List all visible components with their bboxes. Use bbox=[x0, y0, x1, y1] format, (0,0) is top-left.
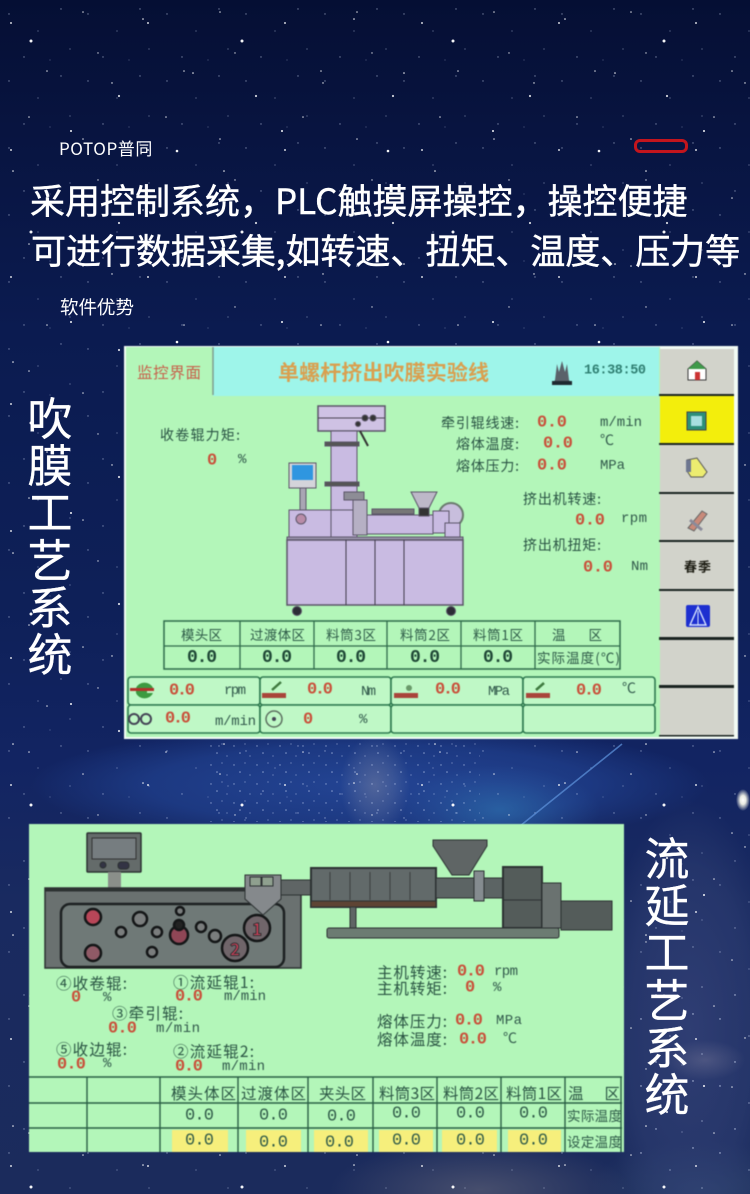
icon: tools bbox=[688, 511, 707, 531]
temperature table: 0.0 bbox=[410, 648, 440, 668]
temperature table: 0.0 bbox=[392, 1104, 421, 1124]
temperature table: 0.0 bbox=[519, 1132, 548, 1150]
vertical title: blown film: 统 bbox=[27, 619, 72, 684]
status grid: rpm bbox=[224, 683, 246, 699]
readouts: main drive and melt: 主机转速: bbox=[377, 961, 447, 983]
temperature table bbox=[164, 621, 620, 669]
readouts: roller speeds: 0.0 bbox=[57, 1056, 86, 1074]
temperature table: 0.0 bbox=[262, 648, 292, 668]
readouts: extruder speed and torque: 0.0 bbox=[575, 512, 605, 530]
temperature table: 0.0 bbox=[336, 648, 366, 668]
temperature table: 0.0 bbox=[259, 1134, 288, 1152]
status grid: 0.0 bbox=[576, 682, 602, 700]
temperature table: 0.0 bbox=[325, 1134, 354, 1152]
readouts: main drive and melt: 0.0 bbox=[459, 1030, 487, 1050]
vertical title: blown film: 吹 bbox=[27, 383, 72, 448]
readouts: main drive and melt: 熔体温度: bbox=[377, 1028, 447, 1050]
status grid: m/min bbox=[215, 714, 256, 730]
readouts: haul-off, melt temperature, melt pressure: 0.0 bbox=[537, 414, 567, 432]
readouts: extruder speed and torque bbox=[523, 489, 648, 578]
section label: 软件优势 bbox=[60, 294, 134, 320]
readouts: main drive and melt: 主机转矩: bbox=[377, 977, 447, 999]
temperature table: 0.0 bbox=[456, 1104, 485, 1124]
temperature table: 0.0 bbox=[185, 1132, 214, 1150]
temperature table: 0.0 bbox=[483, 648, 513, 668]
readouts: roller speeds: % bbox=[103, 990, 112, 1006]
readouts: roller speeds: m/min bbox=[224, 989, 266, 1005]
temperature table: 设定温度 bbox=[567, 1131, 622, 1151]
readouts: haul-off, melt temperature, melt pressure: m/min bbox=[600, 415, 642, 431]
vertical title: cast film: 延 bbox=[644, 870, 690, 935]
status grid: MPa bbox=[488, 684, 510, 700]
temperature table bbox=[29, 1077, 622, 1152]
readouts: main drive and melt: 0.0 bbox=[455, 1012, 483, 1030]
readouts: extruder speed and torque: 挤出机扭矩: bbox=[523, 535, 601, 555]
readouts: roller speeds: m/min bbox=[156, 1021, 200, 1037]
readouts: main drive and melt: 0 bbox=[465, 978, 475, 998]
readout: winder torque bbox=[160, 425, 247, 470]
temperature table: 实际温度(℃) bbox=[537, 647, 620, 667]
readouts: roller speeds: ②流延辊2: bbox=[173, 1040, 254, 1062]
temperature table: 模头区 bbox=[181, 624, 222, 644]
readout: winder torque: % bbox=[238, 452, 247, 468]
readouts: extruder speed and torque: 挤出机转速: bbox=[523, 489, 601, 509]
header bar bbox=[137, 347, 659, 396]
status grid: 0.0 bbox=[307, 680, 333, 700]
readouts: main drive and melt: 熔体压力: bbox=[377, 1010, 447, 1032]
temperature table: 实际温度 bbox=[567, 1105, 622, 1125]
temperature table: 0.0 bbox=[519, 1104, 548, 1124]
temperature table: 0.0 bbox=[187, 648, 217, 668]
readouts: haul-off, melt temperature, melt pressure: 熔体压力: bbox=[456, 456, 519, 476]
panel: cast film control screen bbox=[28, 823, 625, 1153]
temperature table: 0.0 bbox=[456, 1132, 485, 1150]
readouts: haul-off, melt temperature, melt pressure bbox=[441, 413, 642, 476]
icon: home bbox=[688, 361, 706, 380]
status grid: 0.0 bbox=[169, 682, 195, 700]
readouts: roller speeds bbox=[56, 971, 266, 1076]
readouts: main drive and melt: MPa bbox=[496, 1013, 522, 1029]
temperature table: 料筒3区 bbox=[379, 1082, 435, 1104]
readouts: roller speeds: 0.0 bbox=[175, 1058, 203, 1076]
temperature table: 料筒3区 bbox=[326, 624, 376, 644]
side button column bbox=[659, 349, 734, 736]
readouts: main drive and melt: % bbox=[493, 980, 502, 996]
icon: hand bbox=[686, 458, 707, 477]
temperature table: 料筒1区 bbox=[506, 1082, 562, 1104]
readout: winder torque: 0 bbox=[207, 452, 217, 470]
roller numbers bbox=[230, 916, 262, 960]
readouts: haul-off, melt temperature, melt pressure: 牵引辊线速: bbox=[441, 413, 519, 433]
temperature table: 0.0 bbox=[327, 1108, 356, 1126]
readouts: main drive and melt: ℃ bbox=[503, 1032, 517, 1048]
temperature table: 夹头区 bbox=[319, 1082, 366, 1104]
vertical title: blown film: 艺 bbox=[27, 525, 72, 590]
readouts: haul-off, melt temperature, melt pressure: 0.0 bbox=[543, 434, 573, 454]
red pill decoration bbox=[634, 139, 688, 153]
readout: winder torque: 收卷辊力矩: bbox=[160, 425, 240, 445]
readouts: roller speeds: % bbox=[103, 1056, 112, 1072]
readouts: roller speeds: 0.0 bbox=[108, 1020, 137, 1038]
readouts: haul-off, melt temperature, melt pressure: ℃ bbox=[600, 434, 614, 450]
temperature table: 温 区 bbox=[552, 624, 602, 644]
vertical title: cast film: 艺 bbox=[644, 965, 690, 1030]
vertical title: blown film bbox=[27, 383, 72, 684]
readouts: haul-off, melt temperature, melt pressure: 熔体温度: bbox=[456, 434, 519, 454]
temperature table: 0.0 bbox=[259, 1106, 288, 1126]
readouts: roller speeds: 0.0 bbox=[175, 988, 203, 1006]
status grid: % bbox=[359, 712, 368, 728]
readouts: roller speeds: ①流延辊1: bbox=[173, 971, 254, 993]
readouts: main drive and melt: 0.0 bbox=[457, 962, 485, 982]
vertical title: cast film: 流 bbox=[644, 823, 690, 888]
brand label: POTOP普同 bbox=[59, 135, 153, 160]
readouts: main drive and melt: rpm bbox=[494, 964, 518, 980]
temperature table: 0.0 bbox=[392, 1132, 421, 1150]
temperature table: 料筒2区 bbox=[443, 1082, 499, 1104]
temperature table: 0.0 bbox=[185, 1106, 214, 1126]
icon: glyph button: 春季 bbox=[684, 556, 711, 576]
temperature table: 温 区 bbox=[568, 1082, 620, 1104]
vertical title: cast film: 统 bbox=[644, 1059, 690, 1124]
temperature table: 模头体区 bbox=[171, 1082, 236, 1104]
readouts: main drive and melt bbox=[377, 961, 522, 1050]
temperature table: 料筒1区 bbox=[473, 624, 523, 644]
status grid: Nm bbox=[361, 684, 376, 700]
header bar: 监控界面 bbox=[137, 361, 201, 383]
readouts: roller speeds: ⑤收边辊: bbox=[56, 1038, 127, 1060]
header bar: 16:38:50 bbox=[584, 364, 646, 378]
vertical title: blown film: 工 bbox=[27, 477, 72, 542]
icon: monitor bbox=[687, 412, 706, 430]
status grid: 0.0 bbox=[165, 710, 191, 728]
roller numbers: 1 bbox=[252, 916, 262, 940]
headline line 2: 可进行数据采集,如转速、扭矩、温度、压力等 bbox=[31, 224, 740, 275]
roller numbers: 2 bbox=[230, 936, 240, 960]
temperature table: 料筒2区 bbox=[400, 624, 450, 644]
cast film machine illustration bbox=[45, 833, 612, 968]
status grid: 0 bbox=[303, 710, 313, 730]
vertical title: cast film bbox=[644, 823, 690, 1124]
readouts: roller speeds: ④收卷辊: bbox=[56, 972, 127, 994]
readouts: haul-off, melt temperature, melt pressure: 0.0 bbox=[537, 456, 567, 476]
readouts: roller speeds: 0 bbox=[71, 988, 81, 1008]
readouts: extruder speed and torque: rpm bbox=[621, 511, 647, 527]
readouts: roller speeds: m/min bbox=[222, 1059, 265, 1075]
header bar: 单螺杆挤出吹膜实验线 bbox=[278, 357, 489, 387]
readouts: extruder speed and torque: 0.0 bbox=[583, 558, 613, 578]
panel: blown film control screen bbox=[123, 345, 739, 740]
vertical title: cast film: 系 bbox=[644, 1012, 690, 1077]
vertical title: blown film: 膜 bbox=[27, 430, 72, 495]
readouts: haul-off, melt temperature, melt pressure: MPa bbox=[600, 458, 625, 474]
status grid bbox=[128, 677, 655, 733]
blown film machine illustration bbox=[287, 406, 463, 616]
vertical title: blown film: 系 bbox=[27, 572, 72, 637]
readouts: extruder speed and torque: Nm bbox=[631, 559, 648, 575]
readouts: roller speeds: ③牵引辊: bbox=[112, 1002, 183, 1024]
temperature table: 过渡体区 bbox=[250, 624, 305, 644]
icon: warning sign bbox=[686, 605, 710, 627]
temperature table: 过渡体区 bbox=[241, 1082, 306, 1104]
status grid: 0.0 bbox=[435, 680, 461, 700]
status grid: ℃ bbox=[622, 682, 636, 698]
headline line 1: 采用控制系统，PLC触摸屏操控，操控便捷 bbox=[30, 174, 687, 225]
vertical title: cast film: 工 bbox=[644, 917, 690, 982]
